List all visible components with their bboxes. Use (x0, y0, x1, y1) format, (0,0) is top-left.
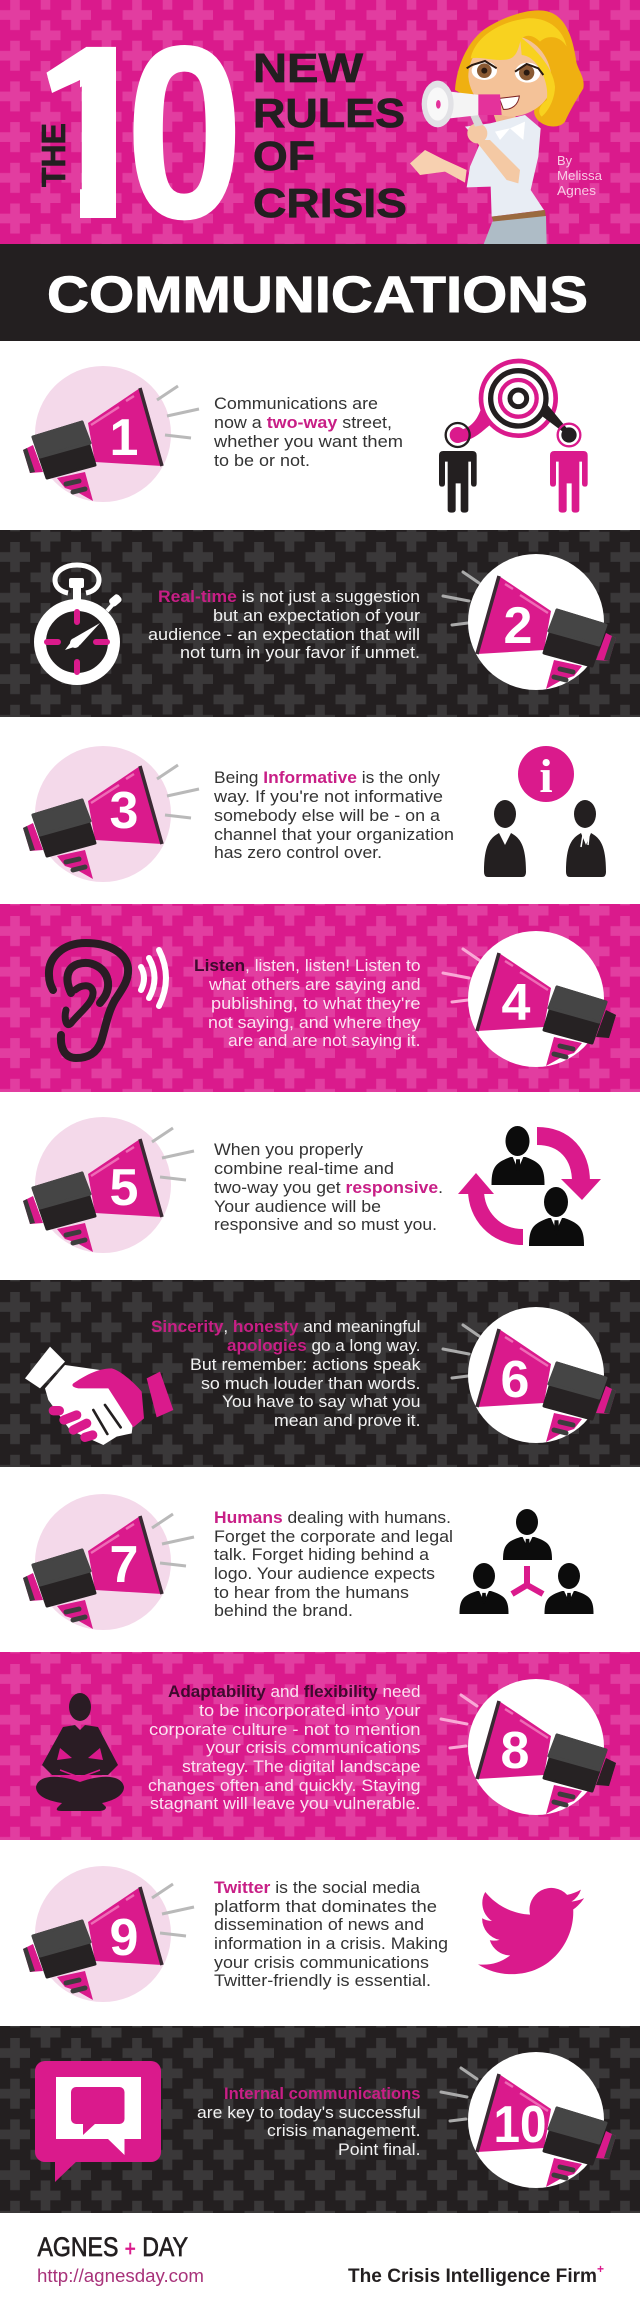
text: rule 1: now a two-way street, (214, 414, 392, 432)
megaphone 5: 5 (110, 1159, 138, 1217)
text: rule 8 (148, 1683, 421, 1813)
text: rule 9 (214, 1879, 448, 1990)
panel: rule 8 (0, 1652, 640, 1840)
text: rule 2: but an expectation of your (213, 607, 421, 625)
title: The 10 new rules of crisis: NEW (253, 45, 363, 91)
megaphone 9 (23, 1866, 194, 2002)
icon: two people with cycle arrows (458, 1126, 601, 1246)
text: rule 9: platform that dominates the (214, 1898, 437, 1916)
text: rule 4: publishing, to what they're (211, 995, 420, 1013)
megaphone 10: 10 (494, 2096, 546, 2154)
panel: header (0, 0, 640, 244)
heading band: communications: COMMUNICATIONS (47, 266, 588, 323)
text: rule 7: talk. Forget hiding behind a (214, 1546, 430, 1564)
text: rule 2: Real-time is not just a suggestion (158, 588, 420, 606)
megaphone 6: 6 (501, 1351, 529, 1409)
icon: meditating person (36, 1693, 124, 1811)
icon: chat bubbles (35, 2061, 161, 2182)
text: rule 10: crisis management. (267, 2122, 420, 2140)
text: rule 6: Sincerity, honesty and meaningful (151, 1318, 421, 1336)
text: rule 4: not saying, and where they (208, 1014, 421, 1032)
title: The 10 new rules of crisis: CRISIS (253, 180, 407, 226)
text: rule 10: are key to today's successful (197, 2104, 420, 2122)
title: The 10 new rules of crisis (42, 45, 406, 220)
text: rule 6: apologies go a long way. (227, 1337, 420, 1355)
text: rule 1: Communications are (214, 395, 378, 413)
title: The 10 new rules of crisis: 0 (125, 0, 244, 272)
icon: three people network (460, 1509, 594, 1614)
panel: rule 6 (0, 1280, 640, 1467)
footer tagline: The Crisis Intelligence Firm (348, 2266, 597, 2287)
megaphone 6 (443, 1307, 616, 1443)
megaphone 3 (23, 746, 199, 882)
text: rule 5: responsive and so must you. (214, 1216, 437, 1234)
text: rule 8: to be incorporated into your (199, 1702, 421, 1720)
text: rule 10: Internal communications (224, 2085, 420, 2103)
text: rule 7: to hear from the humans (214, 1584, 409, 1602)
panel: rule 3 (23, 746, 606, 882)
text: rule 9: your crisis communications (214, 1954, 429, 1972)
megaphone 7: 7 (110, 1536, 138, 1594)
icon: ear with sound waves (49, 943, 166, 1058)
megaphone 4 (443, 931, 616, 1067)
text: rule 6 (151, 1318, 421, 1430)
megaphone 1 (23, 366, 199, 502)
panel: rule 5 (23, 1117, 601, 1253)
megaphone 8 (441, 1679, 616, 1815)
text: rule 5: two-way you get responsive . (214, 1179, 443, 1197)
megaphone 9: 9 (110, 1909, 138, 1967)
byline: By (557, 154, 573, 168)
icon: two people with info bubble (484, 746, 606, 877)
text: rule 7: Humans dealing with humans. (214, 1509, 451, 1527)
panel: rule 2 (0, 530, 640, 717)
megaphone 8: 8 (501, 1722, 529, 1780)
text: rule 1: whether you want them (213, 433, 403, 451)
panel: rule 1 (23, 361, 588, 513)
heading band: communications (0, 244, 640, 341)
megaphone 3: 3 (110, 782, 138, 840)
title: The 10 new rules of crisis: 1 (29, 0, 164, 270)
text: rule 8: your crisis communications (206, 1739, 420, 1757)
text: rule 9: dissemination of news and (214, 1916, 424, 1934)
text: rule 8: strategy. The digital landscape (182, 1758, 420, 1776)
title: The 10 new rules of crisis: RULES (253, 90, 405, 136)
text: rule 6: You have to say what you (222, 1393, 420, 1411)
text: rule 3: somebody else will be - on a (214, 807, 441, 825)
title: The 10 new rules of crisis: OF (253, 133, 315, 179)
text: rule 4: what others are saying and (208, 976, 420, 994)
text: rule 10: Point final. (338, 2141, 420, 2159)
footer link: http://agnesday.com (37, 2266, 204, 2286)
byline: Melissa (557, 169, 602, 183)
byline: Agnes (557, 184, 596, 198)
megaphone 4: 4 (502, 974, 531, 1032)
icon: handshake (25, 1347, 173, 1445)
text: rule 6: mean and prove it. (274, 1412, 420, 1430)
text: rule 6: But remember: actions speak (190, 1356, 421, 1374)
text: rule 3: way. If you're not informative (213, 788, 443, 806)
text: rule 9: Twitter is the social media (214, 1879, 421, 1897)
title: The 10 new rules of crisis: THE (35, 123, 72, 187)
text: rule 7 (214, 1509, 453, 1620)
panel: rule 10 (0, 2026, 640, 2213)
text: rule 3 (213, 769, 454, 862)
text: rule 7: Forget the corporate and legal (214, 1528, 453, 1546)
text: rule 2: audience - an expectation that will (148, 626, 420, 644)
text: rule 10 (197, 2085, 420, 2159)
text: rule 5: When you properly (214, 1141, 364, 1159)
illustration: woman with megaphone (410, 10, 584, 245)
text: rule 5 (214, 1141, 443, 1234)
text: rule 4: Listen, listen, listen! Listen to (194, 957, 420, 975)
footer tagline: + (597, 2262, 604, 2276)
panel: rule 7 (23, 1494, 594, 1630)
panel: rule 4 (0, 904, 640, 1092)
icon: twitter bird (478, 1888, 584, 1974)
text: rule 8: Adaptability and flexibility need (168, 1683, 420, 1701)
text: rule 2 (148, 588, 421, 662)
text: rule 6: so much louder than words. (201, 1375, 420, 1393)
megaphone 2 (443, 554, 616, 690)
text: rule 8: corporate culture - not to mention (149, 1721, 420, 1739)
text: rule 3: Being Informative is the only (214, 769, 441, 787)
text: rule 7: behind the brand. (214, 1602, 353, 1620)
text: rule 8: stagnant will leave you vulnerable. (150, 1795, 420, 1813)
text: rule 7: logo. Your audience expects (214, 1565, 435, 1583)
text: rule 3: channel that your organization (214, 826, 454, 844)
byline (557, 154, 602, 198)
text: rule 4 (194, 957, 421, 1050)
text: rule 5: combine real-time and (214, 1160, 394, 1178)
text: rule 2: not turn in your favor if unmet. (180, 644, 420, 662)
megaphone 1: 1 (110, 409, 138, 467)
megaphone 7 (23, 1494, 194, 1630)
text: rule 1: to be or not. (214, 452, 310, 470)
text: rule 9: Twitter-friendly is essential. (214, 1972, 431, 1990)
text: rule 5: Your audience will be (214, 1198, 381, 1216)
text: rule 3: has zero control over. (214, 844, 382, 862)
icon: stopwatch (40, 565, 123, 679)
icon: two people with info bubble: i (539, 750, 553, 803)
megaphone 10 (441, 2052, 616, 2188)
panel: rule 9 (23, 1866, 584, 2002)
text: rule 1 (213, 395, 403, 470)
text: rule 9: information in a crisis. Making (214, 1935, 448, 1953)
text: rule 8: changes often and quickly. Staying (148, 1777, 420, 1795)
text: rule 4: are and are not saying it. (228, 1032, 420, 1050)
footer logo: Agnes + Day: AGNES + DAY (38, 2232, 188, 2262)
megaphone 2: 2 (504, 597, 532, 655)
icon: two people and target speech bubble (439, 361, 588, 513)
megaphone 5 (23, 1117, 194, 1253)
